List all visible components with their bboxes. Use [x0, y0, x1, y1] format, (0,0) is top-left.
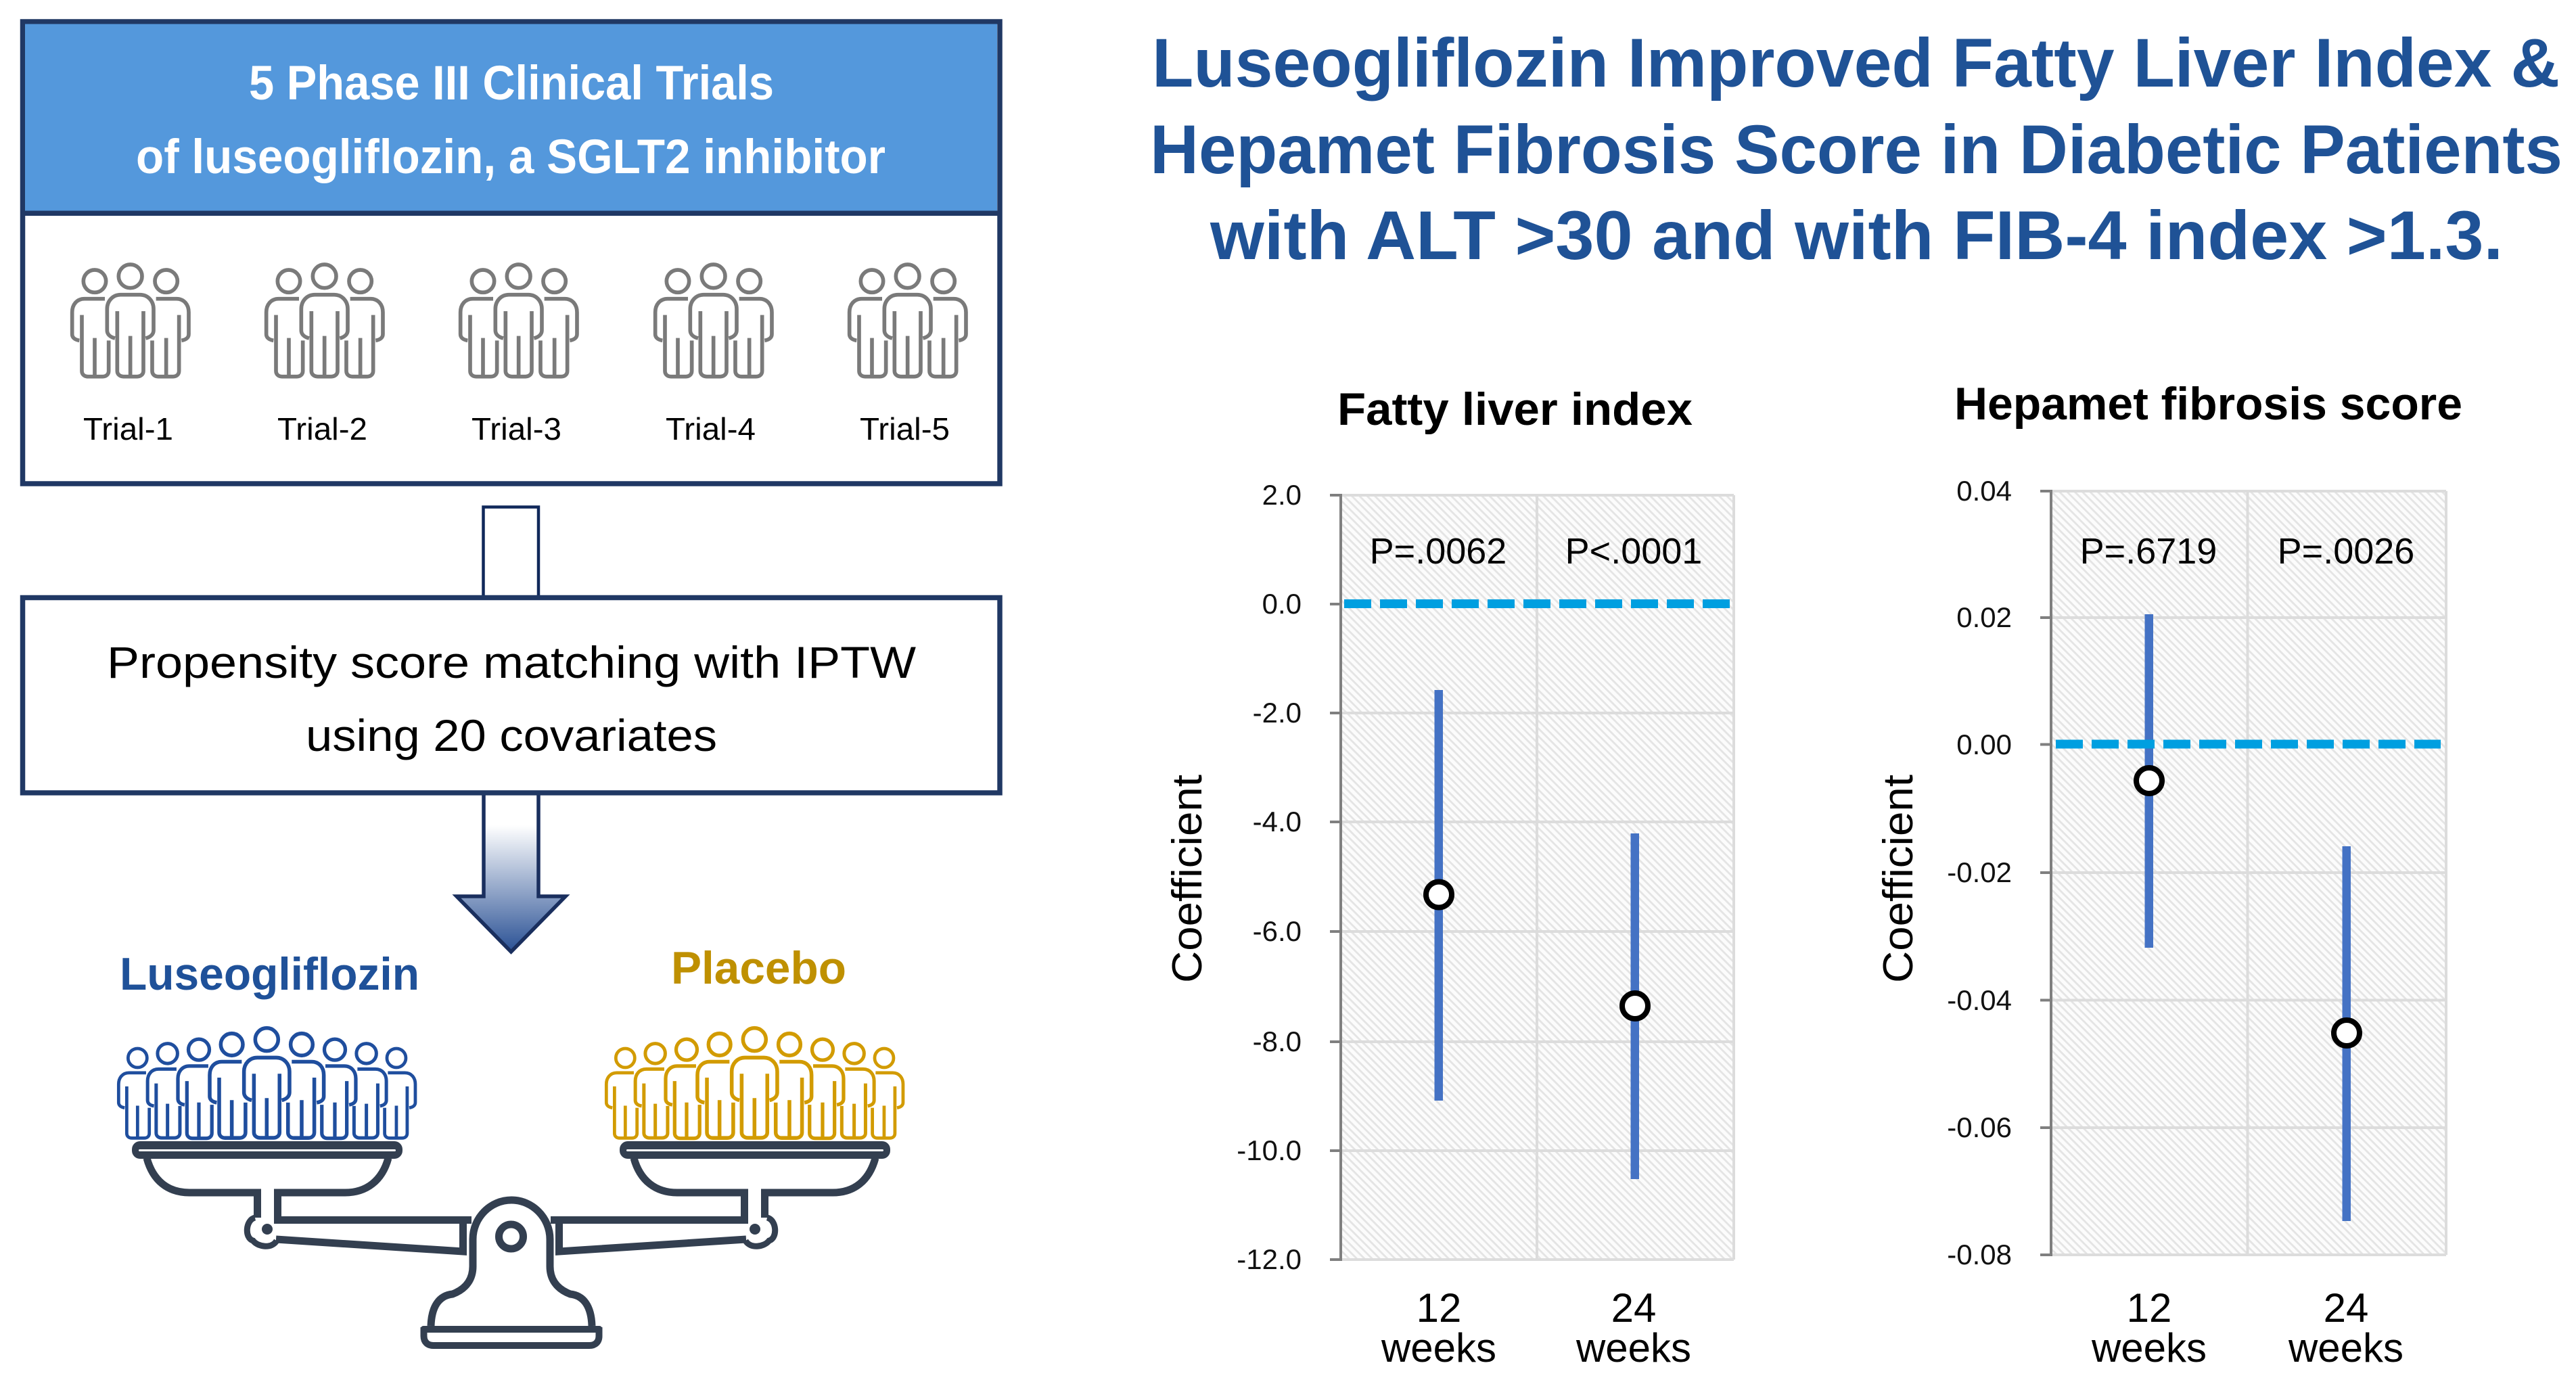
y axis tick labels: -2.0: [1253, 697, 1302, 729]
x axis labels: 24: [1611, 1285, 1656, 1331]
y axis tick labels: 0.04: [1956, 475, 2012, 507]
confidence interval 12 weeks: [1434, 690, 1443, 1101]
trial 5: [850, 264, 966, 446]
chart title: Hepamet fibrosis score: [1954, 378, 2462, 430]
title: [1150, 24, 2562, 274]
arrow: gradient down arrow: [457, 791, 566, 952]
y axis tick labels: -10.0: [1237, 1134, 1302, 1166]
y axis title: Coefficient: [1875, 775, 1922, 983]
icon: luseogliflozin patient group: [118, 1028, 415, 1138]
trial 1: [72, 264, 189, 446]
x axis labels: [2091, 1285, 2404, 1371]
trial 2: [267, 264, 383, 446]
arrow: connector between boxes: [483, 507, 538, 596]
y axis tick labels: 0.00: [1956, 729, 2012, 760]
confidence interval 24 weeks: [2342, 846, 2351, 1221]
point estimate 24 weeks: [1622, 993, 1648, 1019]
chart title: Fatty liver index: [1337, 384, 1693, 435]
y axis tick labels: [1237, 479, 1302, 1275]
panel: hepamet fibrosis score chart: [1875, 378, 2462, 1371]
trial 3: Trial-3: [472, 411, 561, 446]
zero reference line: [1344, 599, 1730, 608]
p values: P<.0001: [1565, 531, 1702, 572]
y axis title: Coefficient: [1164, 775, 1211, 983]
p values: P=.0026: [2278, 531, 2414, 572]
header band: [23, 24, 1000, 216]
y axis tick labels: -8.0: [1253, 1026, 1302, 1057]
icon: balance scale: [132, 1141, 890, 1346]
point estimate 24 weeks: [2334, 1020, 2360, 1046]
x axis labels: weeks: [2288, 1325, 2404, 1371]
title: Hepamet Fibrosis Score in Diabetic Patients: [1150, 111, 2562, 188]
panel: propensity score box: using 20 covariates: [306, 710, 717, 760]
p values: [2080, 531, 2414, 572]
confidence interval 12 weeks: [2144, 614, 2153, 948]
title: with ALT >30 and with FIB-4 index >1.3.: [1210, 197, 2503, 274]
trial 3: [461, 264, 577, 446]
p values: P=.0062: [1370, 531, 1506, 572]
y axis tick labels: -0.08: [1947, 1239, 2012, 1270]
header band: of luseogliflozin, a SGLT2 inhibitor: [136, 131, 886, 184]
y axis tick labels: -6.0: [1253, 915, 1302, 947]
y axis tick labels: -12.0: [1237, 1243, 1302, 1275]
panel: fatty liver index chart: [1164, 384, 1734, 1371]
trial 2: Trial-2: [277, 411, 367, 446]
p values: [1370, 531, 1702, 572]
point estimate 12 weeks: [2136, 768, 2162, 794]
panel: propensity score box: [23, 598, 1000, 793]
trial 5: Trial-5: [860, 411, 950, 446]
confidence interval 24 weeks: [1630, 833, 1639, 1179]
title: Luseogliflozin Improved Fatty Liver Index &: [1152, 24, 2560, 101]
y axis tick labels: 2.0: [1262, 479, 1302, 511]
x axis labels: weeks: [1576, 1325, 1691, 1371]
x axis labels: weeks: [1381, 1325, 1496, 1371]
x axis labels: 24: [2324, 1285, 2368, 1331]
trial 4: [656, 264, 772, 446]
y axis tick labels: -0.02: [1947, 856, 2012, 888]
y axis tick labels: -0.04: [1947, 984, 2012, 1016]
y axis tick labels: -0.06: [1947, 1111, 2012, 1143]
zero reference line: [2056, 740, 2441, 748]
y axis tick labels: 0.0: [1262, 588, 1302, 620]
x axis labels: 12: [1417, 1285, 1461, 1331]
y axis tick labels: 0.02: [1956, 601, 2012, 633]
panel: trials header box: [23, 22, 1000, 484]
label: Placebo: Placebo: [671, 942, 846, 994]
x axis labels: 12: [2127, 1285, 2171, 1331]
point estimate 12 weeks: [1426, 882, 1452, 908]
x axis labels: [1381, 1285, 1691, 1371]
icon: placebo patient group: [606, 1028, 903, 1138]
header band: 5 Phase III Clinical Trials: [249, 57, 774, 110]
x axis labels: weeks: [2091, 1325, 2207, 1371]
y axis tick labels: -4.0: [1253, 806, 1302, 837]
label: Luseogliflozin: Luseogliflozin: [120, 948, 419, 1000]
p values: P=.6719: [2080, 531, 2217, 572]
y axis tick labels: [1947, 475, 2012, 1270]
trial 4: Trial-4: [666, 411, 756, 446]
panel: propensity score box: Propensity score matching with IPTW: [107, 637, 917, 687]
trial 1: Trial-1: [83, 411, 173, 446]
